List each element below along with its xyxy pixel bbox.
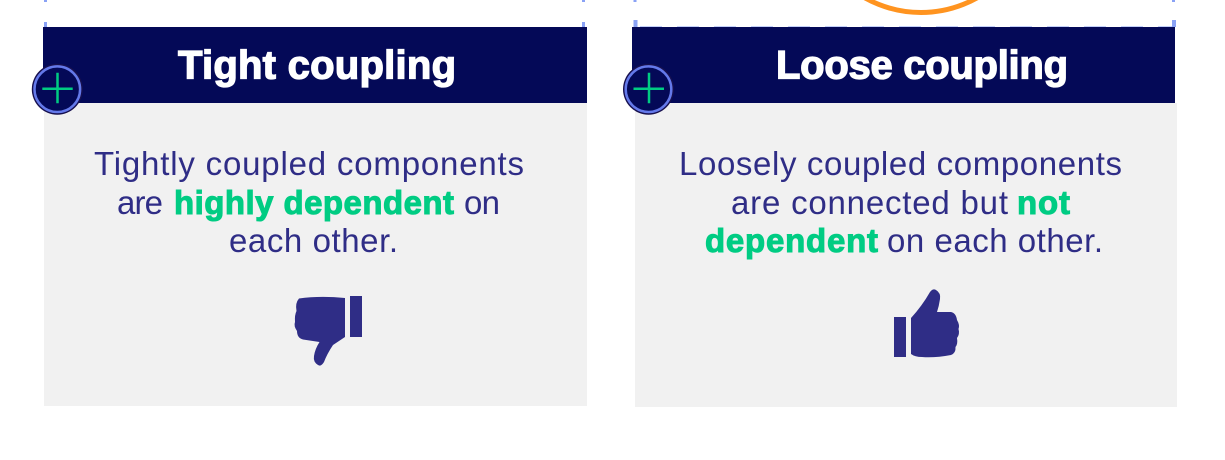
icon: thumbs down bbox=[295, 296, 362, 366]
text block: loose coupling description: on each other. bbox=[887, 222, 1103, 259]
heading: loose coupling bbox=[632, 27, 1175, 103]
icon: plus badge bbox=[623, 64, 674, 115]
text block: loose coupling description: are connected but bbox=[731, 184, 1008, 221]
heading: tight coupling bbox=[43, 27, 587, 103]
text block: loose coupling description: Loosely coupled components bbox=[679, 145, 1122, 182]
text block: tight coupling description: are bbox=[117, 184, 163, 221]
orange circle fragment bbox=[806, 0, 1036, 12]
text block: loose coupling description bbox=[679, 145, 1122, 259]
text block: tight coupling description: Tightly coupled components bbox=[94, 145, 524, 182]
text block: tight coupling description bbox=[94, 145, 524, 259]
heading: tight coupling: Tight coupling bbox=[178, 44, 456, 88]
text block: loose coupling description: not bbox=[1017, 184, 1070, 221]
text block: loose coupling description: dependent bbox=[705, 222, 878, 259]
heading: loose coupling: Loose coupling bbox=[776, 44, 1068, 88]
panel: tight coupling bbox=[32, 0, 587, 406]
text block: tight coupling description: each other. bbox=[229, 222, 398, 259]
icon: plus badge bbox=[32, 64, 83, 115]
text block: tight coupling description: on bbox=[464, 184, 500, 221]
panel: loose coupling bbox=[623, 0, 1177, 407]
text block: tight coupling description: highly dependent bbox=[174, 184, 454, 221]
icon: thumbs up bbox=[894, 289, 959, 357]
